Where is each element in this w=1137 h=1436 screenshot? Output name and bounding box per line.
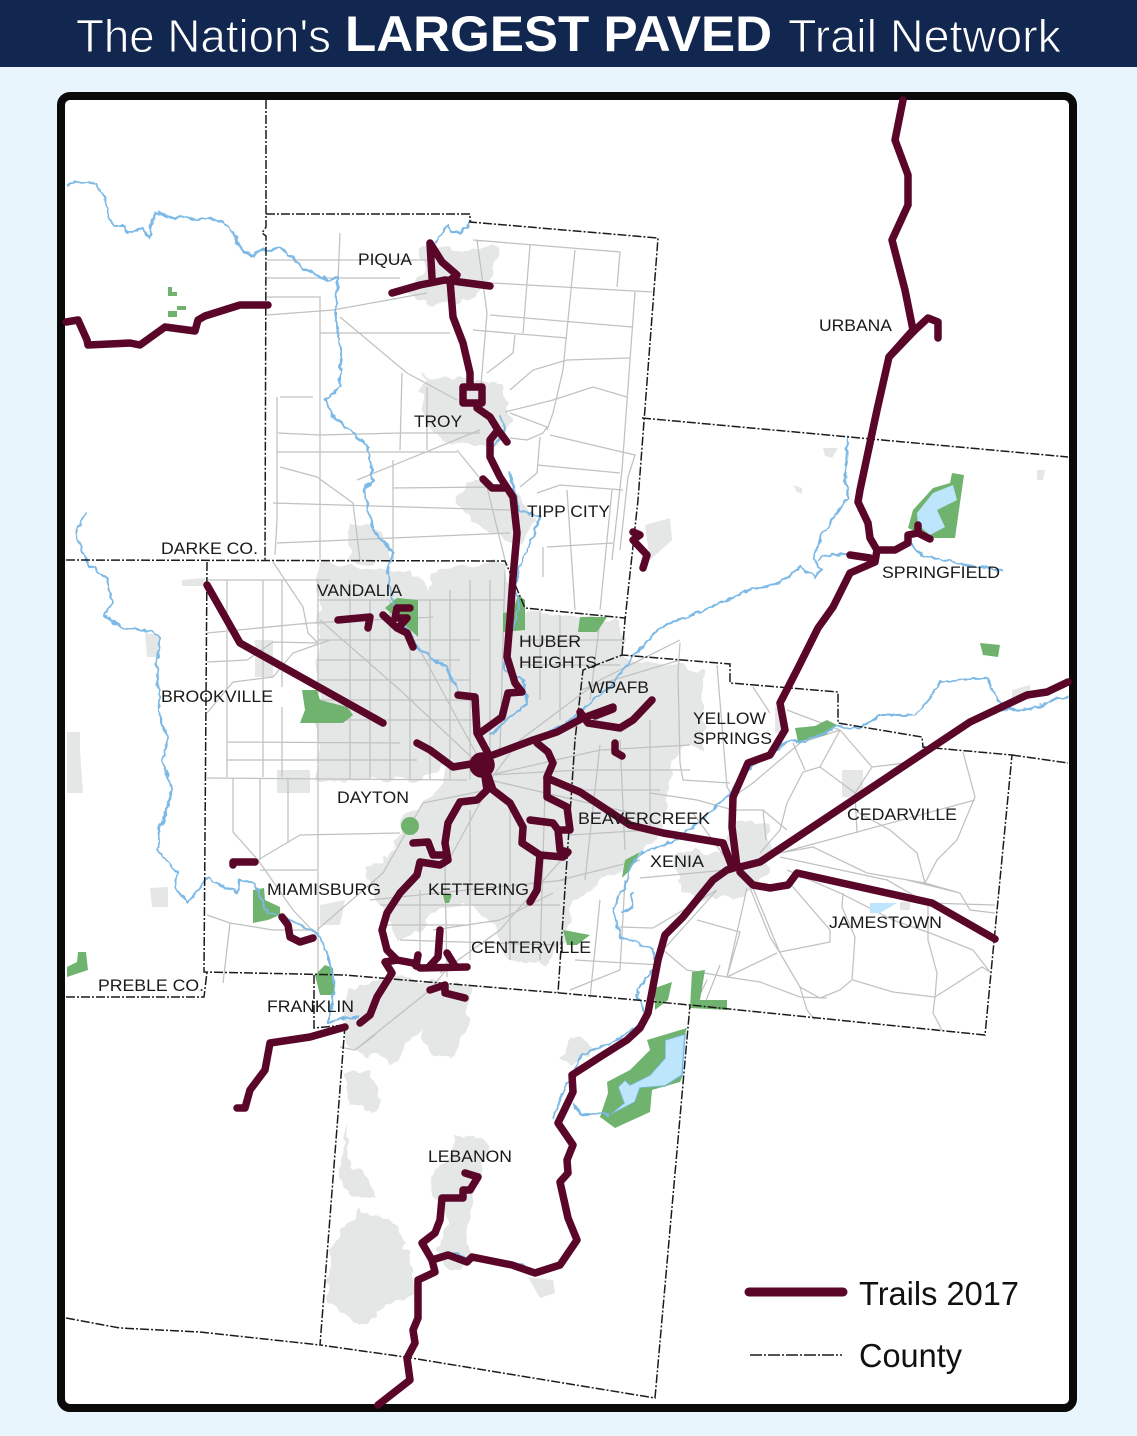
trail: Springfield spur [850, 525, 930, 558]
trail: Warren segment [430, 985, 465, 998]
label: Centerville: CENTERVILLE [471, 938, 591, 957]
legend [749, 1275, 1019, 1374]
label: Springfield: SPRINGFIELD [882, 563, 1000, 582]
legend: county label: County [859, 1337, 962, 1374]
trail: Urbana to Xenia [732, 100, 913, 867]
label: Huber Heights line 2: HEIGHTS [519, 653, 597, 672]
label: Vandalia: VANDALIA [317, 581, 403, 600]
title banner: The Nation's [76, 10, 331, 62]
trail: Urbana spur [889, 318, 938, 357]
trail: Beavercreek branch [487, 743, 570, 902]
trail: west segment [66, 305, 268, 345]
label: Preble Co.: PREBLE CO. [98, 976, 204, 995]
legend: trails swatch [749, 1288, 843, 1296]
trail: Beavercreek to Xenia [547, 778, 732, 867]
label: Jamestown: JAMESTOWN [829, 913, 942, 932]
title banner: LARGEST PAVED [345, 6, 772, 62]
rivers [67, 181, 1068, 1268]
label: Franklin: FRANKLIN [267, 997, 354, 1016]
label: WPAFB: WPAFB [588, 678, 649, 697]
title banner [0, 0, 1137, 67]
label: Piqua: PIQUA [358, 250, 413, 269]
trail: Great Miami north [450, 280, 522, 733]
lake: Springfield [917, 485, 957, 535]
trail: east of Tipp City [633, 532, 647, 568]
trail: Xenia to Jamestown [740, 872, 995, 939]
legend: county swatch [750, 1354, 842, 1356]
trail: Xenia to Cedarville [740, 682, 1068, 867]
urban areas [67, 245, 1045, 1325]
label: Brookville: BROOKVILLE [161, 687, 273, 706]
trail: Dayton centre hub [417, 707, 613, 767]
title banner: Trail Network [788, 10, 1062, 62]
label: Beavercreek: BEAVERCREEK [578, 809, 711, 828]
trail: Dayton north spur [458, 695, 490, 757]
lakes [608, 903, 897, 1116]
trail: Xenia south to Lebanon [422, 867, 737, 1273]
label: Miamisburg: MIAMISBURG [267, 880, 381, 899]
trail: south to Franklin [360, 960, 397, 1023]
label: Dayton: DAYTON [337, 788, 409, 807]
label: Troy: TROY [414, 412, 462, 431]
trail: Dayton southwest [382, 770, 487, 968]
trail: Brookville line [207, 585, 383, 723]
label: Yellow Springs: YELLOW [693, 709, 766, 728]
road network [207, 233, 995, 1050]
legend: trails label: Trails 2017 [859, 1275, 1019, 1312]
trail: short west stub [233, 862, 255, 865]
place labels [98, 250, 1000, 1166]
parks [67, 287, 1000, 1128]
label: Huber Heights: HUBER [519, 632, 581, 651]
label: Lebanon: LEBANON [428, 1147, 512, 1166]
label: Tipp City: TIPP CITY [527, 502, 610, 521]
trail: Franklin southwest [237, 1027, 345, 1108]
trail: Miamisburg [282, 917, 313, 942]
trail: Wright-Patterson branch [580, 700, 652, 756]
label: Kettering: KETTERING [428, 880, 529, 899]
trail: Vandalia [338, 608, 413, 647]
label: Xenia: XENIA [650, 852, 705, 871]
county boundaries [66, 100, 1068, 1398]
trail: south exit [378, 1260, 435, 1405]
trail: Piqua crossing [392, 243, 490, 293]
label: Darke Co.: DARKE CO. [161, 539, 258, 558]
label: Cedarville: CEDARVILLE [847, 805, 957, 824]
label: Urbana: URBANA [819, 316, 893, 335]
label: Yellow Springs line 2: SPRINGS [693, 729, 772, 748]
